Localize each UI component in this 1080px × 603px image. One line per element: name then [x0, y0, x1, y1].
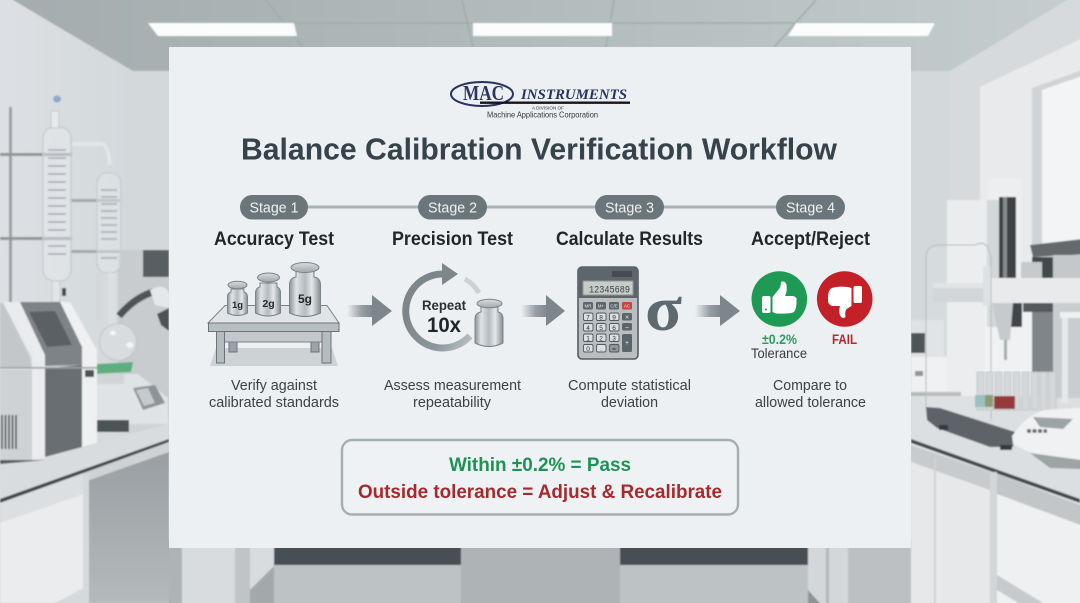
arm: [933, 283, 983, 302]
label: tolerance: ±0.2%: [762, 331, 797, 347]
callout: pass and recalibrate criteria: [342, 440, 738, 514]
icon: calculator: =: [612, 346, 616, 353]
icon: calculator: 4: [586, 325, 590, 332]
far counter right: [911, 320, 961, 396]
stage 1 pill: [240, 195, 308, 220]
glassware: [0, 96, 121, 325]
icon: repeat loop with weight: Repeat: [422, 297, 466, 313]
counter right: [911, 396, 1080, 510]
stage 1 pill: Stage 1: [250, 200, 298, 216]
icon: calculator: [578, 267, 638, 359]
logo: MAC Instruments: Machine Applications Corporation: [487, 110, 598, 120]
heading: Precision Test: Precision Test: [392, 229, 514, 250]
counter left: [0, 424, 168, 500]
icon: calculator: 8: [599, 314, 603, 322]
room beyond the panel bottom: [169, 540, 911, 603]
weight 5g: 5g: [298, 292, 312, 306]
icon: calculator: 0: [586, 346, 590, 353]
balance: [1012, 406, 1080, 466]
weight 1g: 1g: [232, 300, 243, 311]
icon: repeat loop with weight: 10x: [427, 314, 461, 337]
icon: pass thumbs up: [752, 271, 807, 327]
carriage: [1030, 236, 1080, 257]
heading: Accuracy Test: Accuracy Test: [214, 229, 335, 250]
icon: repeat loop with weight: [406, 263, 503, 348]
icon: calculator: MR: [584, 304, 592, 308]
icon: calculator: 3: [612, 336, 616, 342]
icon: calculator: ×: [625, 314, 629, 322]
callout: pass and recalibrate criteria: Within ±0.2% = Pass: [449, 455, 631, 476]
stirrer hotplate: [97, 374, 168, 432]
description: stage 4: [755, 378, 866, 411]
icon: calculator: +: [625, 340, 629, 347]
label: tolerance: [751, 331, 807, 361]
logo: MAC Instruments: INSTRUMENTS: [520, 87, 627, 103]
stage 3 pill: Stage 3: [605, 200, 654, 216]
icon: table with calibration weights: [208, 262, 339, 366]
icon: calculator: C/E: [610, 304, 618, 308]
description: stage 4: Compare to: [773, 378, 847, 394]
heading: Calculate Results: Calculate Results: [556, 229, 703, 250]
icon: calculator: 12345689: [589, 284, 630, 296]
ceiling grid: [150, 0, 935, 47]
icon: calculator: 5: [599, 325, 603, 332]
icon: calculator: 1: [586, 336, 590, 342]
icon: calculator: 9: [612, 314, 616, 322]
stage 2 pill: Stage 2: [428, 200, 477, 216]
heading: Accept/Reject: Accept/Reject: [751, 229, 871, 250]
description: stage 1: [209, 378, 339, 411]
stage 4 pill: [776, 195, 845, 220]
description: stage 1: Verify against: [231, 378, 317, 394]
label: tolerance: Tolerance: [751, 345, 807, 361]
description: stage 1: calibrated standards: [209, 395, 339, 411]
description: stage 2: repeatability: [413, 395, 492, 411]
icon: fail thumbs down: [817, 271, 872, 327]
logo: MAC Instruments: [451, 81, 630, 120]
stage 3 pill: [595, 195, 664, 220]
label: fail: FAIL: [832, 332, 857, 347]
icon: calculator: −: [625, 325, 629, 332]
column: [988, 179, 1021, 278]
autosampler right: [926, 179, 1080, 470]
arrow: stage 1 to 2: [347, 295, 392, 326]
description: stage 3: Compute statistical: [568, 378, 691, 394]
arrow: stage 3 to 4: [695, 295, 740, 326]
callout: pass and recalibrate criteria: Outside tolerance = Adjust & Recalibrate: [358, 482, 722, 503]
microscope left: [118, 250, 169, 420]
ceiling lights: [148, 23, 935, 36]
icon: calculator: AC: [624, 304, 631, 308]
arrow: stage 2 to 3: [521, 295, 565, 326]
left wall: [0, 0, 133, 520]
description: stage 3: [568, 378, 691, 411]
weight: [475, 299, 503, 346]
vials: [977, 372, 1056, 410]
description: stage 2: [384, 378, 521, 411]
logo: MAC Instruments: A DIVISION OF: [532, 106, 564, 110]
ceiling: [13, 0, 1080, 71]
stage 4 pill: Stage 4: [786, 200, 835, 216]
title: Balance Calibration Verification Workflow: [241, 132, 838, 166]
description: stage 4: allowed tolerance: [755, 395, 866, 411]
right wall: [950, 0, 1080, 520]
glass cover: [926, 243, 991, 420]
logo: MAC Instruments: MAC: [463, 81, 504, 105]
icon: sigma symbol: σ: [645, 273, 682, 344]
icon: calculator: 6: [612, 325, 616, 332]
instrument left: [0, 302, 97, 464]
stage connector line: [305, 206, 780, 208]
flask with green liquid: [97, 324, 136, 374]
panel: main card: [169, 47, 911, 548]
stage 2 pill: [418, 195, 487, 220]
weight 2g: 2g: [262, 298, 275, 310]
icon: calculator: M+: [598, 304, 605, 308]
tray: [926, 407, 1015, 447]
icon: calculator: 7: [586, 314, 590, 322]
description: stage 3: deviation: [601, 395, 658, 411]
icon: calculator: 2: [599, 336, 603, 342]
description: stage 2: Assess measurement: [384, 378, 521, 394]
icon: calculator: .: [600, 346, 602, 353]
